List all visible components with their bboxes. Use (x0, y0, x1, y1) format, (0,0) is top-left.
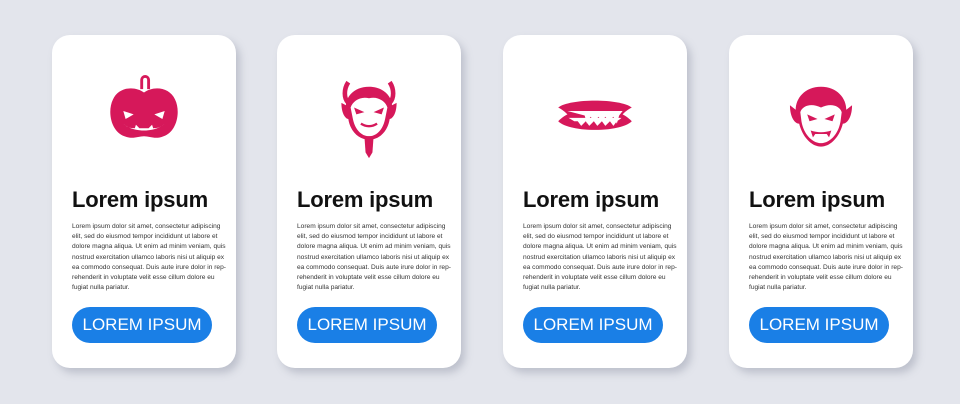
button: LOREM IPSUM (82, 315, 202, 334)
heading: Lorem ipsum (749, 187, 885, 212)
button: LOREM IPSUM (307, 315, 427, 334)
button: LOREM IPSUM (533, 315, 653, 334)
card 2: devil (277, 35, 461, 368)
card 1: pumpkin (52, 35, 236, 368)
text block: Lorem ipsum dolor sit amet, consectetur adipiscing elit, sed do eiusmod tempor incididunt ut labore et dolore magna aliqua. Ut enim ad minim veniam, quis nostrud exercitation ullamco laboris nisi ut aliquip ex ea commodo consequat. Duis aute irure dolor in rep-rehenderit in voluptate velit esse cillum dolore eu fugiat nulla pariatur. (297, 223, 451, 291)
button (297, 307, 437, 343)
button (72, 307, 212, 343)
icon: devil (341, 80, 397, 158)
icon: pumpkin (110, 75, 178, 138)
button: LOREM IPSUM (759, 315, 879, 334)
button (523, 307, 663, 343)
card 4: vampire (729, 35, 913, 368)
heading: Lorem ipsum (297, 187, 433, 212)
card 3: fangs (503, 35, 687, 368)
text block: Lorem ipsum dolor sit amet, consectetur adipiscing elit, sed do eiusmod tempor incididunt ut labore et dolore magna aliqua. Ut enim ad minim veniam, quis nostrud exercitation ullamco laboris nisi ut aliquip ex ea commodo consequat. Duis aute irure dolor in rep-rehenderit in voluptate velit esse cillum dolore eu fugiat nulla pariatur. (523, 223, 677, 291)
text block: Lorem ipsum dolor sit amet, consectetur adipiscing elit, sed do eiusmod tempor incididunt ut labore et dolore magna aliqua. Ut enim ad minim veniam, quis nostrud exercitation ullamco laboris nisi ut aliquip ex ea commodo consequat. Duis aute irure dolor in rep-rehenderit in voluptate velit esse cillum dolore eu fugiat nulla pariatur. (72, 223, 226, 291)
heading: Lorem ipsum (523, 187, 659, 212)
text block: Lorem ipsum dolor sit amet, consectetur adipiscing elit, sed do eiusmod tempor incididunt ut labore et dolore magna aliqua. Ut enim ad minim veniam, quis nostrud exercitation ullamco laboris nisi ut aliquip ex ea commodo consequat. Duis aute irure dolor in rep-rehenderit in voluptate velit esse cillum dolore eu fugiat nulla pariatur. (749, 223, 903, 291)
heading: Lorem ipsum (72, 187, 208, 212)
icon: fangs mouth (558, 100, 632, 130)
icon: vampire (790, 86, 852, 147)
button (749, 307, 889, 343)
